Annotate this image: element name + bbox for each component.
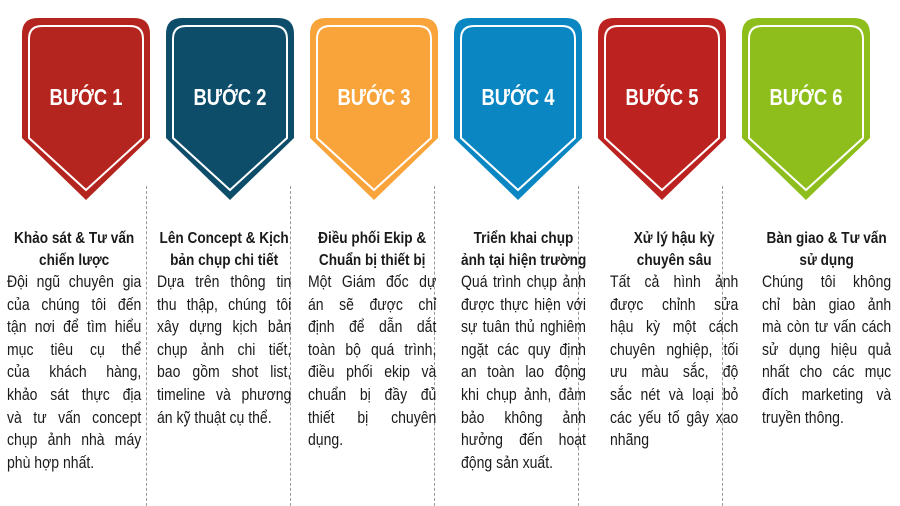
column 6 <box>762 230 892 427</box>
column 3: dụng. <box>308 431 343 449</box>
column 1: tận nơi để tìm hiểu <box>7 318 141 336</box>
column 5: chuyên sâu <box>637 252 712 268</box>
column 1: Khảo sát & Tư vấn <box>14 230 134 247</box>
badge: step 4: BƯỚC 4 <box>482 83 555 110</box>
column 3: định để dẫn dắt <box>308 318 436 336</box>
badge: step 1: BƯỚC 1 <box>50 83 123 110</box>
column 2 <box>157 230 291 427</box>
column 4: Quá trình chụp ảnh <box>461 273 586 291</box>
column 4: bảo không ảnh <box>461 409 586 427</box>
badge: step 5: BƯỚC 5 <box>626 83 699 110</box>
badge: step 6: BƯỚC 6 <box>770 83 842 110</box>
column 2: bao gồm shot list, <box>157 363 291 381</box>
column 5: Tất cả hình ảnh <box>610 273 738 291</box>
column 2: chụp ảnh chi tiết, <box>157 341 291 359</box>
column 4: được thực hiện với <box>461 296 586 314</box>
column 5: ưu màu sắc, độ <box>610 363 738 381</box>
column 4: Triển khai chụp <box>474 230 573 247</box>
badge: step 4 <box>454 18 582 200</box>
column 3: án sẽ được chỉ <box>308 296 436 314</box>
column 2: bản chụp chi tiết <box>170 252 278 268</box>
column 6: chỉ bàn giao ảnh <box>762 296 891 314</box>
column 3: Chuẩn bị thiết bị <box>319 252 425 268</box>
column 2: xây dựng kịch bản <box>157 318 291 336</box>
column 5: sắc nét và loại bỏ <box>610 386 738 404</box>
column 4: động sản xuất. <box>461 454 553 472</box>
column 4: hưởng đến hoạt <box>461 431 586 449</box>
column 2: án kỹ thuật cụ thể. <box>157 409 272 427</box>
column 6: sử dụng hiệu quả <box>762 341 891 359</box>
column 3: thiết bị chuyên <box>308 409 436 427</box>
badge: step 3 <box>310 18 438 200</box>
column 4: ngặt các quy định <box>461 341 586 359</box>
badge: step 2 <box>166 18 294 200</box>
column 1 <box>7 230 142 472</box>
column 1: của chúng tôi đến <box>7 296 141 314</box>
badge: step 1 <box>22 18 150 200</box>
column 5: các yếu tố gây xao <box>610 409 738 427</box>
column 4: khi chụp ảnh, đảm <box>461 386 586 404</box>
column 5: Xử lý hậu kỳ <box>634 230 715 247</box>
column 6: Bàn giao & Tư vấn <box>767 230 887 247</box>
column 1: của khách hàng, <box>7 363 141 381</box>
column 5: hậu kỳ một cách <box>610 318 738 336</box>
column 3: chuẩn bị đầy đủ <box>308 386 436 404</box>
column 6: truyền thông. <box>762 409 844 427</box>
column 6: sử dụng <box>799 252 854 268</box>
column 2: Dựa trên thông tin <box>157 273 291 291</box>
column 1: chụp ảnh nhà máy <box>7 431 141 449</box>
column 4: ảnh tại hiện trường <box>461 252 586 268</box>
column 5: nhãng <box>610 431 649 449</box>
column 5 <box>610 230 738 449</box>
badge: step 2: BƯỚC 2 <box>194 83 266 110</box>
column 1: phù hợp nhất. <box>7 454 94 472</box>
column 4: an toàn lao động <box>461 363 586 381</box>
column 2: timeline và phương <box>157 386 291 404</box>
column 2: Lên Concept & Kịch <box>160 230 289 247</box>
badge: step 3: BƯỚC 3 <box>338 83 410 110</box>
column 3 <box>308 230 436 449</box>
column 5: được chỉnh sửa <box>610 296 738 314</box>
column 1: chiến lược <box>39 252 109 268</box>
column 6: Chúng tôi không <box>762 273 891 291</box>
column 1: Đội ngũ chuyên gia <box>7 273 141 291</box>
column 3: điều phối ekip và <box>308 363 436 381</box>
badges <box>22 18 870 200</box>
column 5: chuyên nghiệp, tối <box>610 341 738 359</box>
column 1: và tư vấn concept <box>7 409 141 427</box>
column 1: khảo sát thực địa <box>7 386 141 404</box>
badge: step 5 <box>598 18 726 200</box>
badge: step 6 <box>742 18 870 200</box>
column 3: Điều phối Ekip & <box>318 230 426 247</box>
column 6: nhất cho các mục <box>762 363 891 381</box>
column 6: mà còn tư vấn cách <box>762 318 891 336</box>
column 3: Một Giám đốc dự <box>308 273 436 291</box>
column 4 <box>461 230 586 472</box>
column 3: toàn bộ quá trình, <box>308 341 436 359</box>
column 6: đích marketing và <box>762 386 891 404</box>
column 1: mục tiêu cụ thể <box>7 341 141 359</box>
column 4: sự tuân thủ nghiêm <box>461 318 586 336</box>
column 2: thu thập, chúng tôi <box>157 296 291 314</box>
